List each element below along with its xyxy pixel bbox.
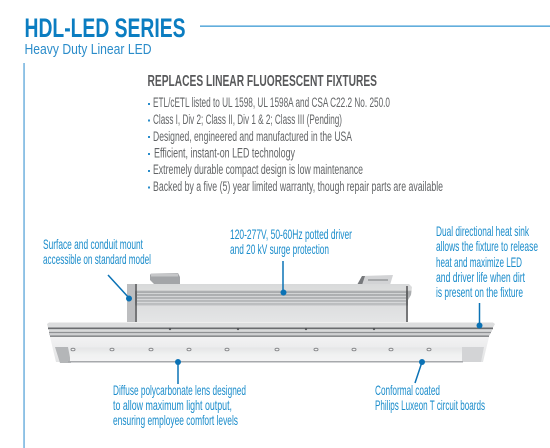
callout: dual directional heat sink (436, 223, 538, 328)
end caps (55, 347, 71, 363)
heat sink grooves (48, 328, 493, 329)
callout: driver and surge protection: 120-277V, 50-60Hz potted driver (230, 226, 352, 242)
upper heat sink body (127, 284, 412, 322)
callout: diffuse polycarbonate lens: ensuring employee comfort levels (113, 412, 238, 428)
left mounting bracket (150, 273, 180, 285)
lower flange rivets (169, 328, 375, 330)
callout: diffuse polycarbonate lens: to allow maximum light output, (113, 397, 232, 413)
callout: diffuse polycarbonate lens (113, 359, 246, 428)
list heading: REPLACES LINEAR FLUORESCENT FIXTURES (148, 73, 377, 90)
bullet 3: Designed, engineered and manufactured in the USA (153, 129, 352, 144)
callout: surface and conduit mount (43, 236, 151, 302)
header rule (200, 26, 550, 27)
lens screws (71, 348, 431, 351)
lower housing (50, 337, 489, 362)
callout: surface and conduit mount: Surface and conduit mount (43, 236, 143, 252)
callout: driver and surge protection (230, 226, 352, 296)
left vertical rule (23, 63, 25, 448)
bullet 1: ETL/cETL listed to UL 1598, UL 1598A and CSA C22.2 No. 250.0 (153, 95, 390, 110)
end straps (136, 284, 407, 322)
title: HDL-LED SERIES (24, 13, 186, 43)
callout: conformal coated circuit boards (375, 359, 485, 413)
lens (70, 348, 462, 362)
callout: surface and conduit mount: accessible on standard model (43, 251, 151, 267)
subtitle: Heavy Duty Linear LED (24, 41, 152, 58)
callout: conformal coated circuit boards: Conformal coated (375, 382, 440, 398)
right mounting bracket (357, 275, 393, 285)
lower housing top flange (47, 322, 495, 328)
callout: driver and surge protection: and 20 kV surge protection (230, 241, 329, 257)
bullet 2: Class I, Div 2; Class II, Div 1 & 2; Class III (Pending) (153, 112, 342, 127)
LED fixture illustration (47, 273, 495, 363)
callout: diffuse polycarbonate lens: Diffuse polycarbonate lens designed (113, 382, 246, 398)
bullet 5: Extremely durable compact design is low maintenance (153, 162, 363, 177)
feature list panel (148, 73, 443, 194)
bullet 4: Efficient, instant-on LED technology (154, 146, 295, 160)
